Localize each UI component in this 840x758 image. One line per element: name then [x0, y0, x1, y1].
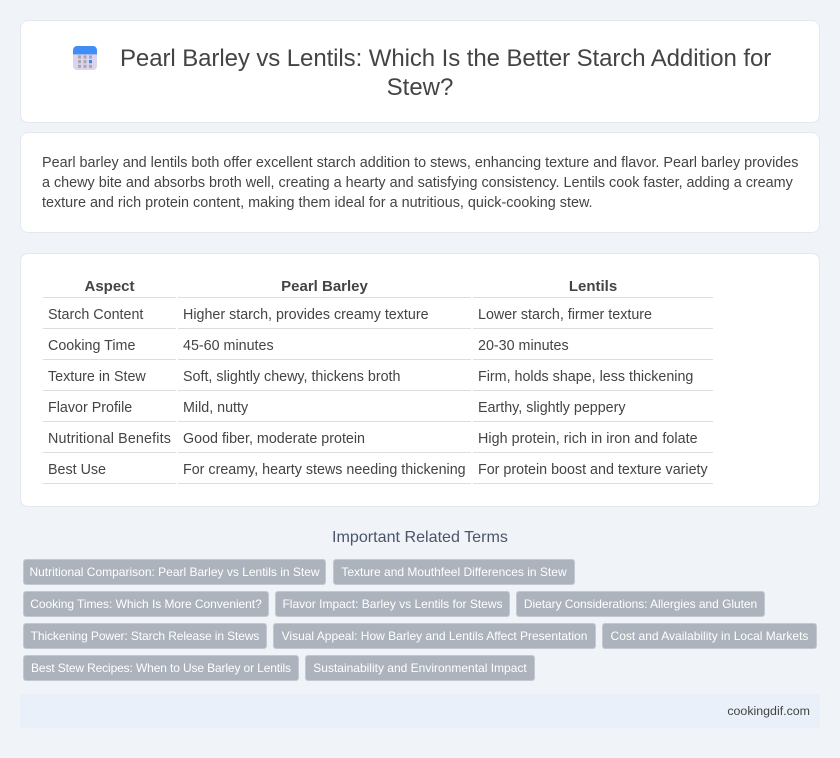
footer bar [20, 694, 820, 728]
panel: description [20, 132, 820, 233]
comparison table: High protein, rich in iron and folate [478, 431, 698, 447]
icon: calendar [73, 46, 97, 70]
comparison table: 20-30 minutes [478, 338, 569, 354]
related term tags: Cost and Availability in Local Markets [611, 629, 808, 643]
text block: description: texture and rich protein content, making them ideal for a nutritious, quick-cooking stew. [42, 195, 593, 211]
comparison table: Lentils [569, 278, 617, 295]
comparison table: Mild, nutty [183, 400, 248, 416]
comparison table: Texture in Stew [48, 369, 146, 385]
related term tags: Dietary Considerations: Allergies and Gluten [524, 597, 757, 611]
related term tags: Best Stew Recipes: When to Use Barley or Lentils [31, 661, 291, 675]
comparison table: Aspect [84, 278, 135, 295]
comparison table: Soft, slightly chewy, thickens broth [183, 369, 400, 385]
comparison table: Firm, holds shape, less thickening [478, 369, 693, 385]
comparison table: Nutritional Benefits [48, 431, 171, 447]
comparison table: Pearl Barley [281, 278, 368, 295]
panel: title card [20, 20, 820, 123]
comparison table: Good fiber, moderate protein [183, 431, 365, 447]
comparison table: Flavor Profile [48, 400, 132, 416]
comparison table: For creamy, hearty stews needing thickening [183, 462, 466, 478]
related term tags: Texture and Mouthfeel Differences in Stew [341, 565, 567, 579]
title [120, 45, 771, 101]
comparison table [43, 278, 713, 484]
related term tags: Sustainability and Environmental Impact [313, 661, 527, 675]
comparison table: Lower starch, firmer texture [478, 307, 652, 323]
related term tags: Thickening Power: Starch Release in Stews [31, 629, 259, 643]
title: Stew? [387, 74, 453, 101]
panel: comparison table [20, 253, 820, 507]
text block: description [42, 155, 798, 211]
comparison table: For protein boost and texture variety [478, 462, 708, 478]
title: Pearl Barley vs Lentils: Which Is the Better Starch Addition for [120, 45, 771, 72]
related term tags: Nutritional Comparison: Pearl Barley vs Lentils in Stew [29, 565, 320, 579]
related term tags: Visual Appeal: How Barley and Lentils Affect Presentation [282, 629, 587, 643]
comparison table: 45-60 minutes [183, 338, 274, 354]
comparison table: Starch Content [48, 307, 143, 323]
text block: description: Pearl barley and lentils both offer excellent starch addition to stews, enhancing texture and flavor. Pearl barley provides [42, 155, 798, 171]
comparison table: Higher starch, provides creamy texture [183, 307, 429, 323]
related term tags [23, 559, 817, 681]
comparison table: Earthy, slightly peppery [478, 400, 626, 416]
comparison table: Cooking Time [48, 338, 135, 354]
comparison table: Best Use [48, 462, 106, 478]
footer source text: cookingdif.com [727, 704, 810, 718]
heading: related terms: Important Related Terms [332, 528, 508, 546]
text block: description: a chewy bite and absorbs broth well, creating a hearty and satisfying consistency. Lentils cook faster, adding a creamy [42, 175, 793, 191]
related term tags: Cooking Times: Which Is More Convenient? [30, 597, 262, 611]
related term tags: Flavor Impact: Barley vs Lentils for Stews [282, 597, 503, 611]
